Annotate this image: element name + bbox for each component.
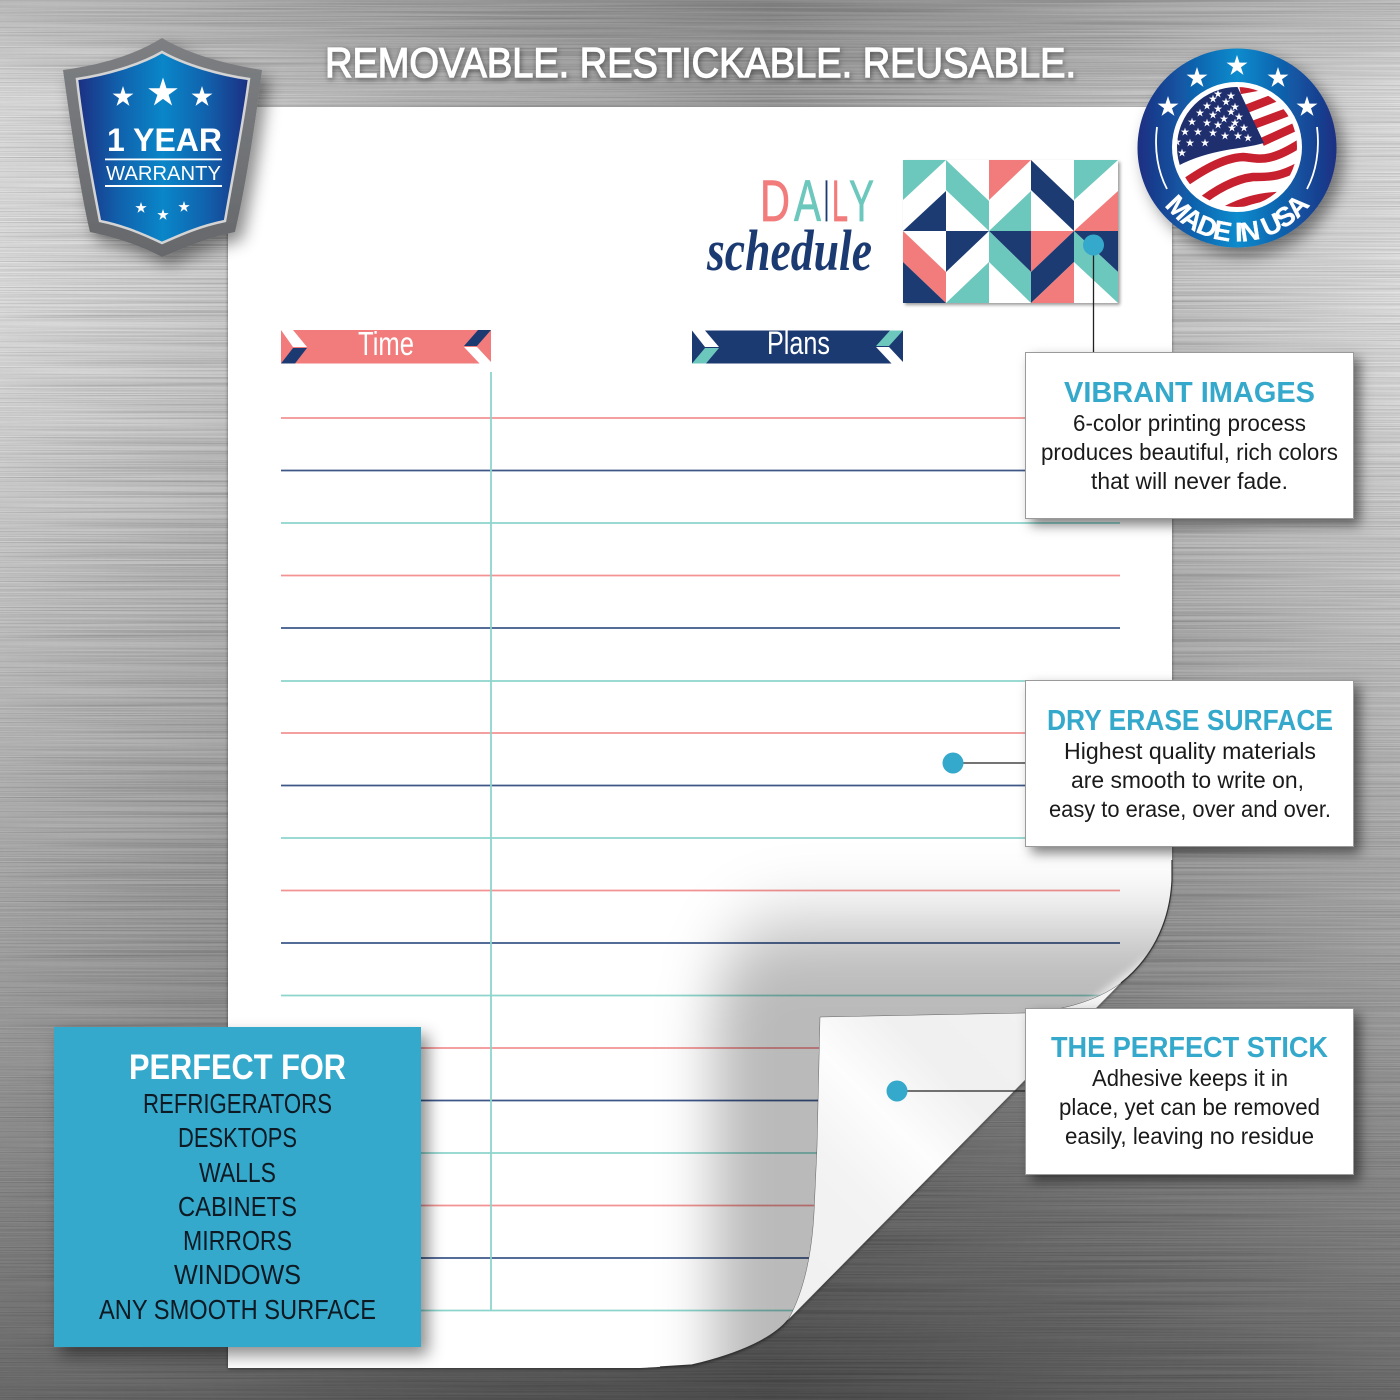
panel: perfect for: DESKTOPS	[178, 1122, 297, 1153]
schedule header: daily schedule	[706, 169, 874, 283]
callout: vibrant images: produces beautiful, rich colors	[1041, 439, 1338, 465]
panel: perfect for: PERFECT FOR	[129, 1048, 346, 1087]
curled page edge	[660, 860, 1172, 1367]
schedule header: daily schedule: A	[794, 169, 821, 234]
panel: perfect for: REFRIGERATORS	[143, 1088, 332, 1119]
connector: dry erase surface	[942, 752, 1025, 774]
panel: dry erase schedule sheet	[228, 107, 1240, 1400]
callout: the perfect stick: Adhesive keeps it in	[1092, 1065, 1288, 1091]
banner: Time	[281, 325, 491, 364]
panel: perfect for: WINDOWS	[174, 1259, 301, 1290]
callout: dry erase surface: Highest quality materials	[1064, 738, 1316, 764]
callout: the perfect stick	[1026, 1008, 1354, 1174]
callout: dry erase surface	[1026, 680, 1354, 846]
callout: vibrant images	[1026, 352, 1354, 518]
icon: 1 year warranty shield: WARRANTY	[106, 163, 221, 185]
icon: 1 year warranty shield: 1 YEAR	[107, 122, 222, 158]
banner: Time: Time	[358, 325, 414, 362]
schedule header: daily schedule: L	[832, 169, 848, 234]
callout: vibrant images: that will never fade.	[1091, 468, 1288, 494]
panel: perfect for: WALLS	[199, 1157, 276, 1188]
callout: the perfect stick: THE PERFECT STICK	[1051, 1032, 1328, 1064]
callout: vibrant images: VIBRANT IMAGES	[1064, 377, 1315, 409]
ruled schedule lines	[281, 372, 1120, 1310]
callout: the perfect stick: easily, leaving no residue	[1065, 1123, 1314, 1149]
icon: made in USA badge	[1134, 47, 1354, 265]
american flag	[1177, 87, 1297, 207]
callout: dry erase surface: easy to erase, over and over.	[1049, 796, 1331, 822]
schedule header: daily schedule: Y	[849, 169, 874, 234]
page curl flap	[788, 983, 1121, 1320]
callout: dry erase surface: are smooth to write on,	[1071, 767, 1304, 793]
panel: perfect for: MIRRORS	[183, 1225, 292, 1256]
title: REMOVABLE. RESTICKABLE. REUSABLE.	[325, 39, 1076, 86]
panel: perfect for: CABINETS	[178, 1191, 297, 1222]
connector: the perfect stick	[886, 1080, 1025, 1102]
callout: vibrant images: 6-color printing process	[1073, 410, 1306, 436]
icon: 1 year warranty shield	[63, 38, 262, 257]
panel: perfect for	[54, 1027, 421, 1347]
schedule header: daily schedule: schedule	[706, 218, 872, 283]
schedule header: daily schedule: D	[760, 169, 790, 234]
geometric pattern image	[903, 160, 1118, 303]
banner: Plans	[692, 325, 903, 364]
callout: dry erase surface: DRY ERASE SURFACE	[1047, 705, 1333, 737]
icon: made in USA badge: MADE IN USA	[1165, 194, 1310, 242]
schedule header: daily schedule: I	[824, 169, 829, 234]
connector: vibrant images	[1083, 234, 1104, 352]
panel: perfect for: ANY SMOOTH SURFACE	[99, 1294, 376, 1325]
badge stars	[1158, 55, 1317, 116]
banner: Plans: Plans	[767, 325, 830, 361]
callout: the perfect stick: place, yet can be removed	[1059, 1094, 1320, 1120]
page curl shadow	[714, 925, 1240, 1400]
